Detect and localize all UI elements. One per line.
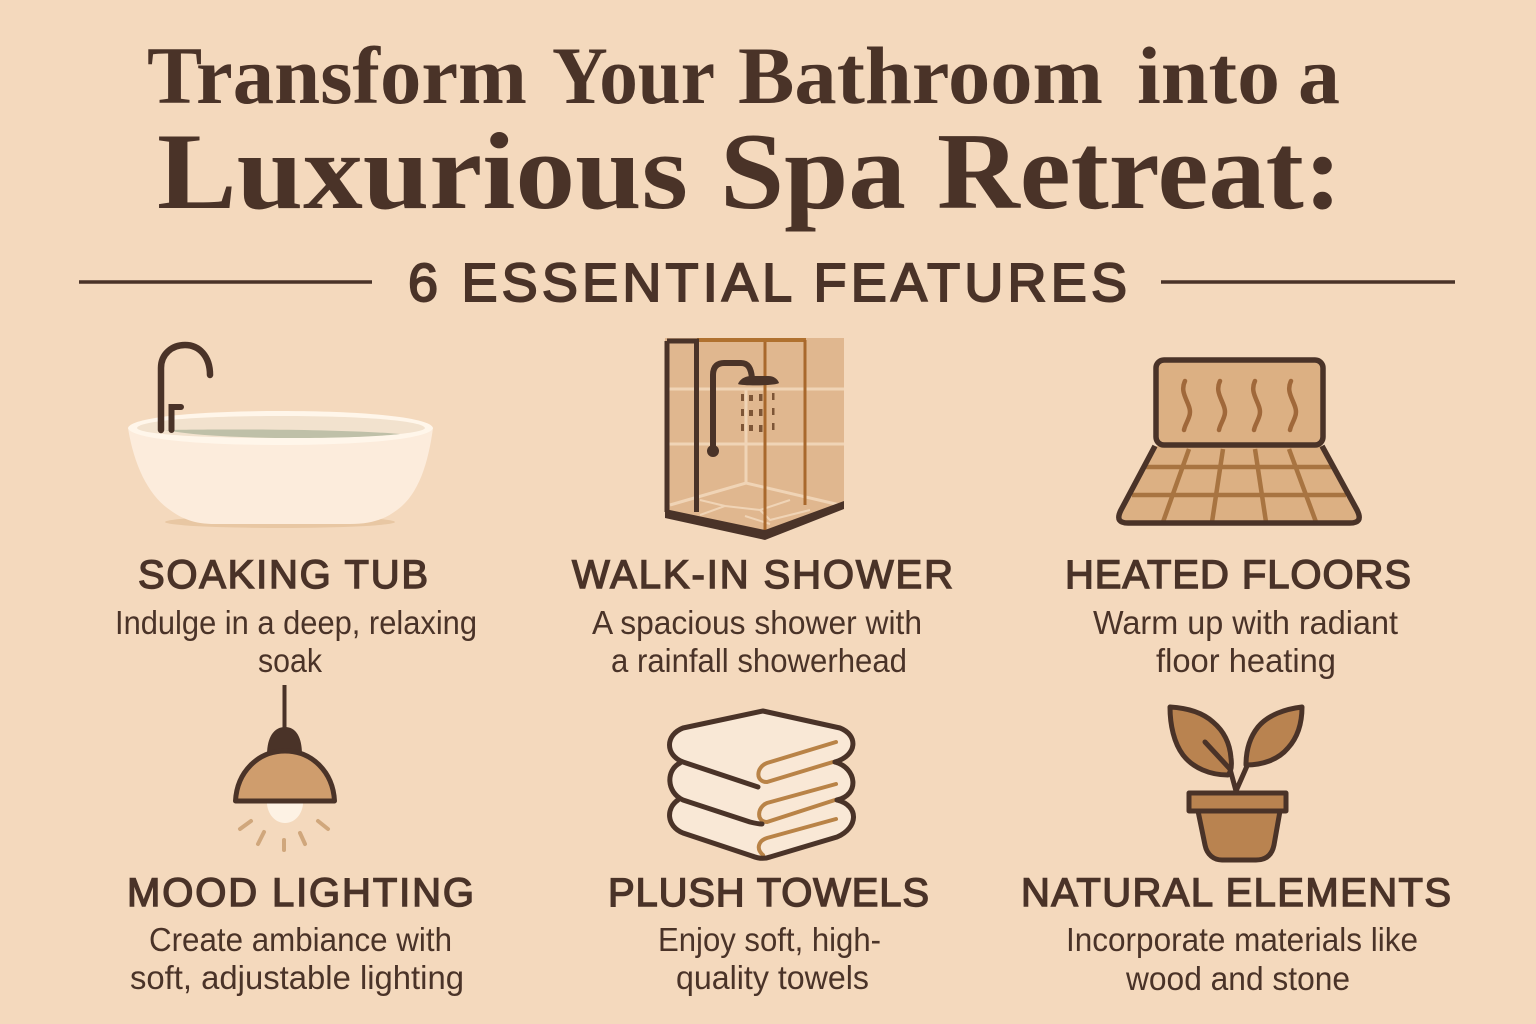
title: Your [552,30,715,121]
title: Spa [720,111,906,232]
description: plush towels: quality towels [676,959,869,996]
description: walk-in shower: A spacious shower with [592,604,922,641]
title: Transform [147,30,527,121]
panel: natural elements [1021,707,1451,997]
panel: heated floors [1065,360,1411,679]
description: soaking tub: soak [258,642,322,679]
description: heated floors: floor heating [1156,642,1336,679]
icon: potted plant [1170,707,1302,860]
description: plush towels: Enjoy soft, high- [658,921,881,958]
title: Luxurious [157,111,688,232]
label: plush towels: PLUSH TOWELS [608,871,929,915]
description: heated floors: Warm up with radiant [1093,604,1398,641]
description: plush towels [658,921,881,996]
label: natural elements: NATURAL ELEMENTS [1021,871,1451,915]
title: Bathroom [738,30,1103,121]
icon: heated floor [1119,360,1359,523]
icon: shower [665,338,844,540]
title: into [1137,30,1280,121]
description: mood lighting: soft, adjustable lighting [130,959,464,996]
description: mood lighting [130,921,464,996]
icon: folded towels [669,711,854,858]
title: Retreat: [937,111,1342,232]
label: mood lighting: MOOD LIGHTING [127,871,474,915]
description: natural elements: Incorporate materials like [1066,921,1418,958]
description: walk-in shower: a rainfall showerhead [611,642,907,679]
label: soaking tub: SOAKING TUB [138,553,428,597]
label: walk-in shower: WALK-IN SHOWER [572,553,953,597]
description: soaking tub [115,604,477,679]
description: natural elements: wood and stone [1125,960,1350,997]
panel: plush towels [608,711,929,996]
title: a [1298,30,1340,121]
description: heated floors [1093,604,1398,679]
icon: pendant lamp [236,685,334,850]
description: mood lighting: Create ambiance with [149,921,452,958]
description: soaking tub: Indulge in a deep, relaxing [115,604,477,641]
title [147,30,1342,232]
description: natural elements [1066,921,1418,997]
description: walk-in shower [592,604,922,679]
panel: mood lighting [127,685,474,996]
panel: soaking tub [115,345,477,679]
panel: walk-in shower [572,338,953,679]
icon: bathtub [128,345,433,528]
label: heated floors: HEATED FLOORS [1065,553,1411,597]
subtitle: 6 essential features: 6 ESSENTIAL FEATURES [408,253,1127,313]
